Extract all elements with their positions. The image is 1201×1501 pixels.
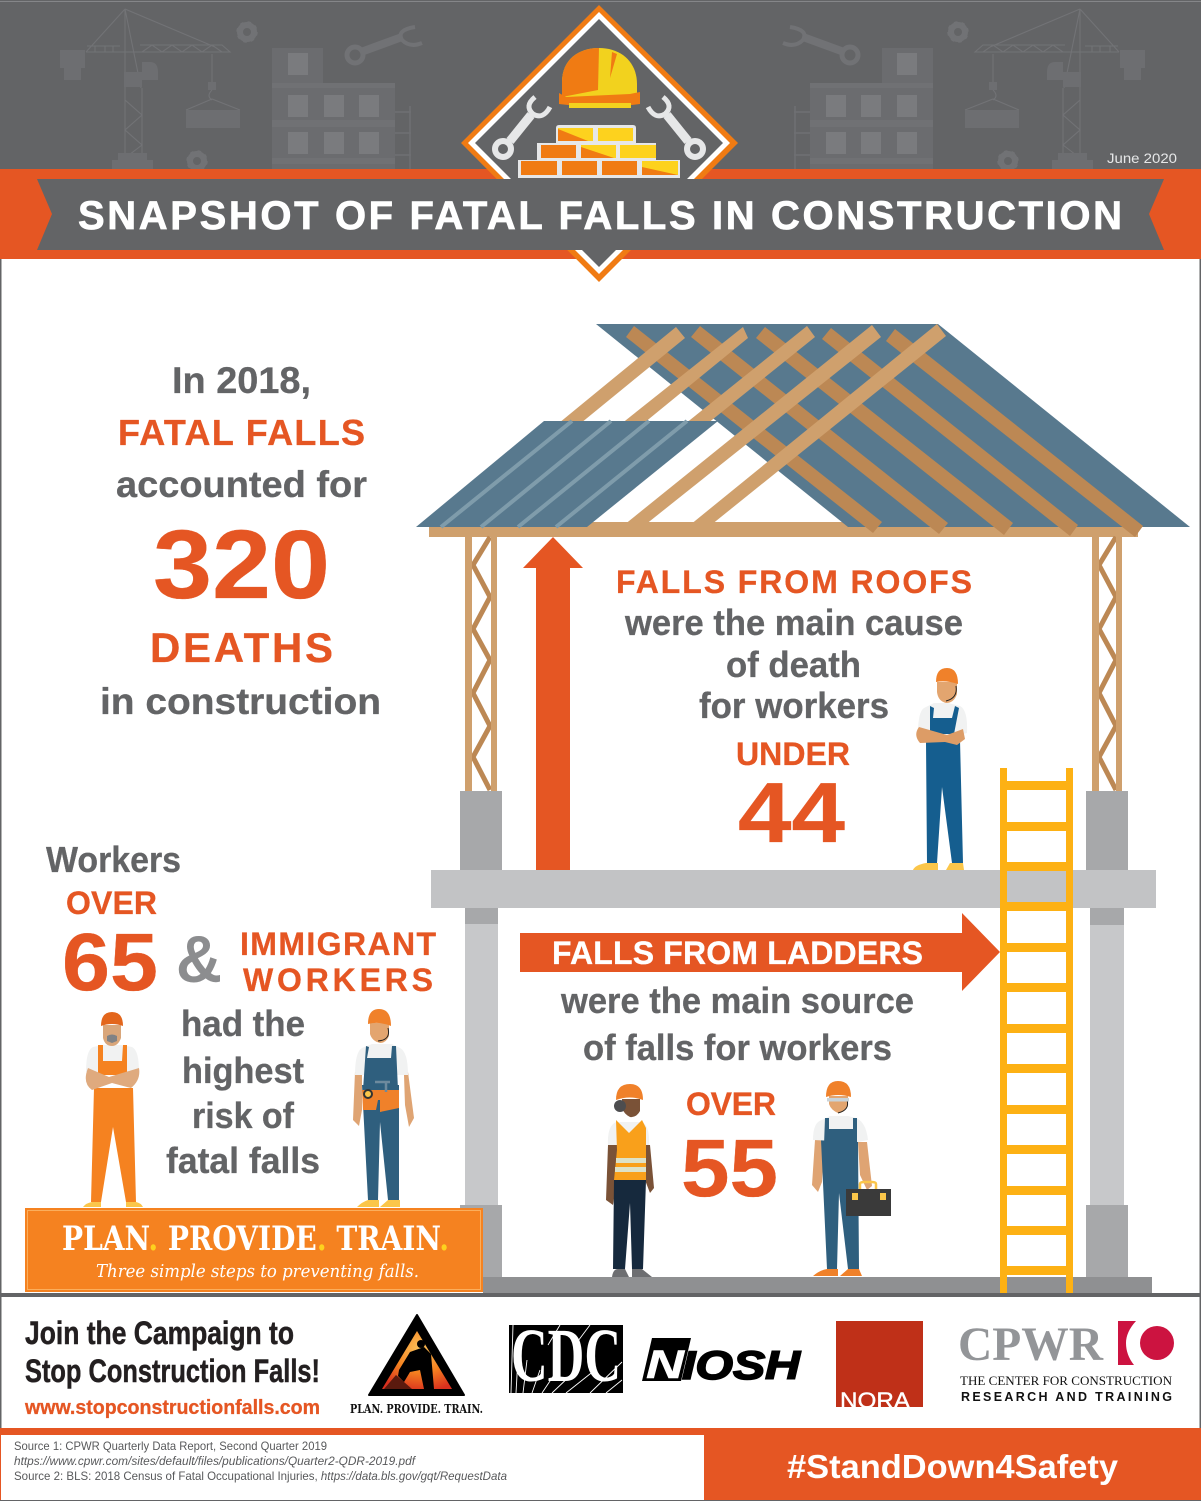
worker: immigrant worker with tool belt [353,1009,414,1207]
callout: highest risk workers: 65 [62,917,158,1008]
callout: falls from roofs: UNDER [736,736,850,772]
callout: highest risk workers: & [176,922,222,996]
statistic block: 320 deaths: accounted for [116,464,367,505]
callout: highest risk workers [46,839,436,1181]
campaign text [24,1315,320,1419]
logo: NORA: NORA [840,1388,910,1413]
date label: June 2020 [1107,150,1177,166]
header illustration: left construction scene [60,9,422,170]
statistic block: 320 deaths: In 2018, [172,360,311,401]
logo: CPWR: RESEARCH AND TRAINING [961,1390,1172,1404]
roof back panel [596,324,1190,527]
plan provide train banner [25,1208,483,1292]
statistic block: 320 deaths: FATAL FALLS [118,412,365,453]
callout: falls from roofs: for workers [699,685,889,726]
callout: falls from ladders: OVER [686,1086,776,1122]
callout: highest risk workers: had the [181,1003,305,1044]
callout: falls from ladders: of falls for workers [583,1027,892,1068]
callout: falls from roofs: were the main cause [624,602,963,643]
plan provide train banner: PLAN. PROVIDE. TRAIN. [62,1219,449,1259]
logo: NIOSH: N [646,1343,685,1387]
icon: right wrench [648,97,703,157]
left timber truss [465,537,497,791]
worker: man with toolbox [812,1081,891,1276]
source text: Source 2: BLS: 2018 Census of Fatal Occupational Injuries, https://data.bls.gov/gqt/RequestData [14,1469,507,1483]
orange title band [0,169,1201,259]
statistic block: 320 deaths: in construction [100,681,381,722]
logo: NORA [836,1321,923,1413]
roof front panel [416,421,718,527]
worker: roof, blue overalls [913,668,967,870]
roof beam [429,522,1138,537]
icon: hard hat [559,48,640,108]
callout: highest risk workers: IMMIGRANT [240,926,436,962]
callout: falls from ladders: FALLS FROM LADDERS [552,935,923,971]
plan provide train banner: Three simple steps to preventing falls. [96,1261,419,1282]
right arrow [520,913,1000,991]
logo: CDC: CDC [511,1314,621,1398]
callout: falls from roofs: 44 [738,766,845,861]
callout: falls from roofs [616,564,972,861]
concrete structure [0,791,1201,1297]
roof panel highlights [441,421,687,527]
callout: highest risk workers: OVER [66,885,157,921]
callout: highest risk workers: highest [182,1050,304,1091]
campaign text: Join the Campaign to [25,1315,294,1351]
icon: brick stack [518,125,680,178]
ladder [1000,768,1073,1293]
dark rafters [626,326,1143,537]
callout: highest risk workers: risk of [192,1095,295,1136]
source text: Source 1: CPWR Quarterly Data Report, Second Quarter 2019 [14,1439,327,1453]
statistic block: 320 deaths [100,360,381,722]
light rafters [548,324,946,525]
hashtag: #StandDown4Safety [787,1448,1119,1485]
diamond badge [461,5,738,282]
icon: left wrench [495,97,550,157]
statistic block: 320 deaths: 320 [153,510,330,619]
logo: NIOSH: IOSH [682,1344,801,1388]
toolbox [846,1182,891,1216]
header background [0,0,1201,170]
callout: falls from roofs: of death [726,644,861,685]
logo: CPWR [958,1318,1174,1404]
source text: https://www.cpwr.com/sites/default/files/publications/Quarter2-QDR-2019.pdf [14,1454,417,1468]
footer band [0,1428,1201,1501]
callout: falls from ladders: 55 [681,1123,778,1214]
callout: falls from roofs: FALLS FROM ROOFS [616,564,972,600]
source text [14,1439,507,1483]
logo: NIOSH [642,1338,801,1388]
worker: older man, orange overalls [83,1012,143,1207]
callout: falls from ladders: were the main source [560,980,914,1021]
logo: plan provide train triangle [350,1315,483,1416]
roof structure [416,324,1190,537]
up arrow [523,537,583,870]
right timber truss [1092,537,1122,791]
campaign text: www.stopconstructionfalls.com [24,1397,320,1419]
logo: CPWR: THE CENTER FOR CONSTRUCTION [960,1373,1173,1388]
title: SNAPSHOT OF FATAL FALLS IN CONSTRUCTION [78,194,1122,238]
callout: highest risk workers: Workers [46,839,181,880]
logo: CPWR: CPWR [958,1318,1104,1371]
logo: plan provide train triangle: PLAN. PROVIDE. TRAIN. [350,1402,483,1416]
callout: falls from ladders [552,935,923,1214]
callout: highest risk workers: fatal falls [166,1140,320,1181]
title ribbon [37,179,1164,250]
campaign text: Stop Construction Falls! [25,1353,320,1389]
callout: highest risk workers: WORKERS [243,962,433,998]
logo: CDC [509,1314,623,1398]
worker: woman in safety vest [606,1084,654,1277]
header illustration: right construction scene [783,9,1145,170]
statistic block: 320 deaths: DEATHS [150,624,333,671]
